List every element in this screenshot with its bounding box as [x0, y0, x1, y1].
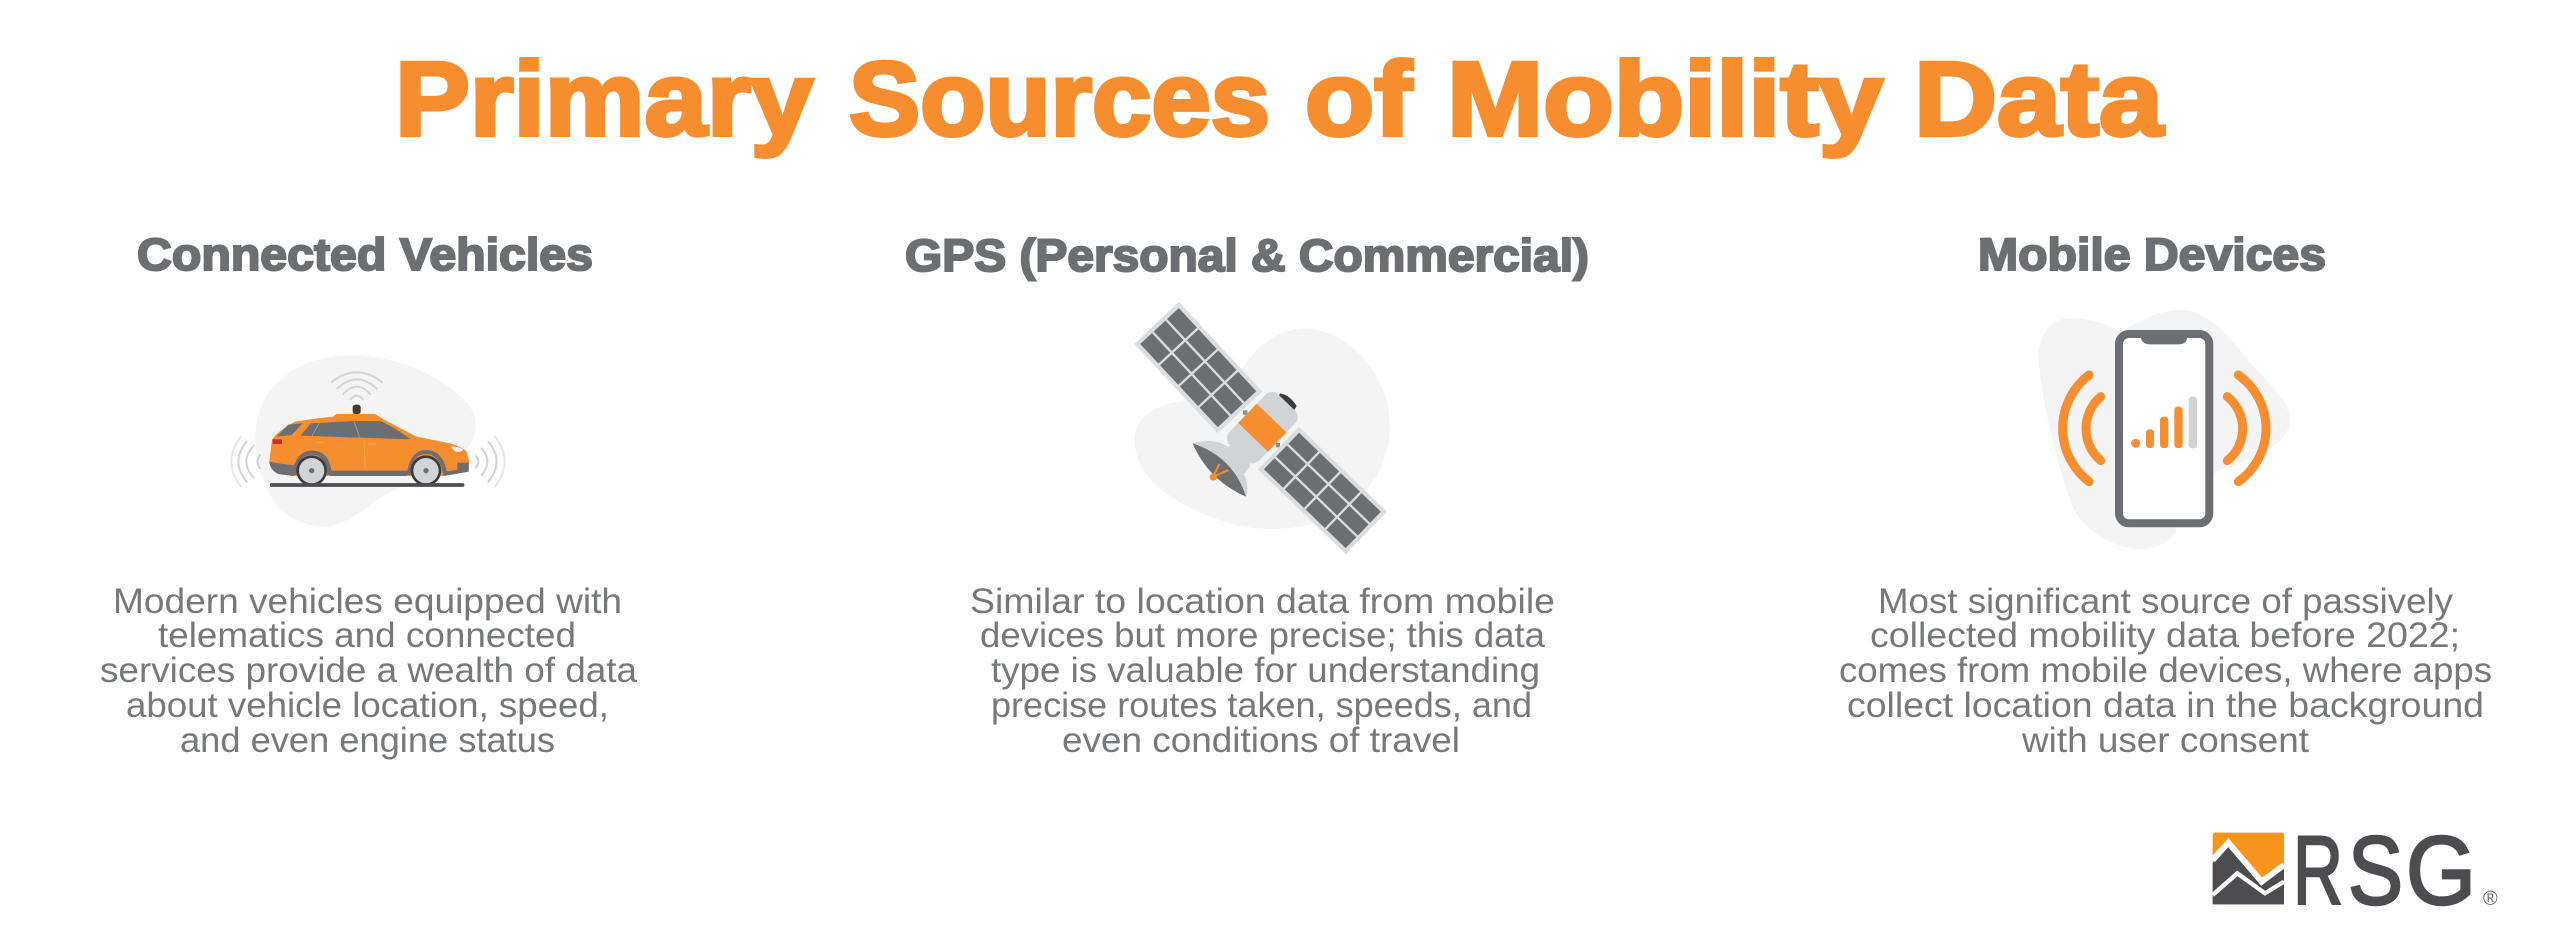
description: gps: type is valuable for understanding	[991, 651, 1540, 690]
description: mobile devices: collected mobility data before 2022;	[1870, 616, 2460, 655]
description: connected vehicles: telematics and connected	[158, 616, 576, 655]
description: connected vehicles: and even engine status	[180, 721, 555, 760]
description: mobile devices	[1839, 582, 2492, 760]
description: gps: Similar to location data from mobile	[970, 582, 1555, 621]
description: gps: devices but more precise; this data	[980, 616, 1546, 655]
title: Primary	[395, 41, 813, 158]
description: mobile devices: comes from mobile devices, where apps	[1839, 651, 2492, 690]
description: connected vehicles: about vehicle location, speed,	[126, 686, 609, 725]
description: mobile devices: Most significant source of passively	[1878, 582, 2454, 621]
description: connected vehicles	[100, 582, 638, 760]
logo: RSG	[2213, 816, 2498, 925]
heading: connected vehicles: Connected Vehicles	[137, 229, 593, 280]
panel: connected vehicles	[100, 229, 638, 760]
description: gps: precise routes taken, speeds, and	[991, 686, 1532, 725]
wordmark: S	[2348, 816, 2403, 925]
description: mobile devices: with user consent	[2021, 721, 2309, 760]
wordmark	[2293, 816, 2476, 925]
registered mark: ®	[2483, 888, 2498, 910]
heading: gps: GPS (Personal & Commercial)	[905, 230, 1589, 281]
title: of	[1305, 41, 1413, 158]
description: gps	[970, 582, 1555, 760]
icon: satellite	[1134, 302, 1390, 554]
icon: phone with signal	[2038, 310, 2290, 549]
description: connected vehicles: Modern vehicles equipped with	[113, 582, 622, 621]
title: Sources	[849, 41, 1270, 158]
description: connected vehicles: services provide a wealth of data	[100, 651, 638, 690]
icon: RSG mountain mark	[2213, 833, 2284, 904]
icon: connected car	[231, 355, 505, 527]
heading: mobile devices: Mobile Devices	[1978, 229, 2326, 280]
description: gps: even conditions of travel	[1062, 721, 1460, 760]
description: mobile devices: collect location data in the background	[1847, 686, 2484, 725]
title: Mobility	[1447, 41, 1883, 158]
wordmark: G	[2406, 816, 2476, 925]
panel: gps	[905, 230, 1589, 760]
title: Data	[1914, 41, 2165, 158]
panel: mobile devices	[1839, 229, 2492, 760]
title	[395, 41, 2165, 158]
wordmark: R	[2293, 816, 2343, 925]
